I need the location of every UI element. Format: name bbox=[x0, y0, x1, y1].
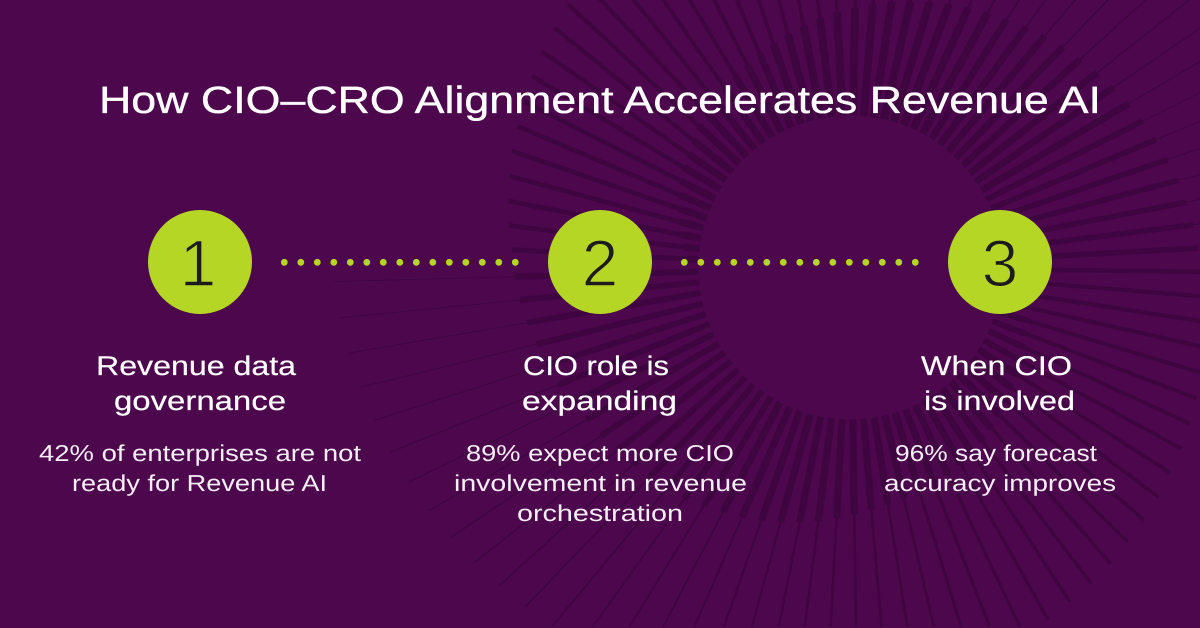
heading: CIO role is expanding bbox=[522, 351, 677, 416]
text: 42% stat bbox=[39, 440, 362, 496]
dotted connector: step 2 to step 3 bbox=[684, 259, 916, 266]
text: 89% stat: 89% expect more CIO bbox=[466, 440, 734, 466]
heading: CIO role is expanding: CIO role is bbox=[523, 351, 669, 381]
text: 89% stat: orchestration bbox=[517, 500, 683, 526]
heading: when CIO is involved: When CIO bbox=[921, 351, 1072, 381]
heading: revenue data governance: governance bbox=[114, 386, 286, 416]
number badge 3: 3 bbox=[982, 226, 1018, 300]
number badge 3 bbox=[948, 210, 1052, 314]
text: 96% stat: 96% say forecast bbox=[895, 440, 1098, 466]
text: 89% stat bbox=[454, 440, 747, 526]
text: 42% stat: ready for Revenue AI bbox=[72, 470, 327, 496]
panel: step 1 bbox=[39, 210, 362, 496]
dotted connector: step 1 to step 2 bbox=[284, 259, 516, 266]
number badge 2: 2 bbox=[582, 226, 618, 300]
heading: when CIO is involved: is involved bbox=[924, 386, 1075, 416]
panel: step 2 bbox=[454, 210, 747, 526]
text: 42% stat: 42% of enterprises are not bbox=[39, 440, 362, 466]
heading: revenue data governance bbox=[96, 351, 297, 416]
heading: revenue data governance: Revenue data bbox=[96, 351, 297, 381]
heading: when CIO is involved bbox=[921, 351, 1075, 416]
title: How CIO–CRO Alignment Accelerates Revenue AI bbox=[99, 80, 1101, 122]
number badge 2 bbox=[548, 210, 652, 314]
text: 96% stat: accuracy improves bbox=[884, 470, 1116, 496]
sunburst background rays bbox=[334, 0, 1200, 628]
text: 96% stat bbox=[884, 440, 1116, 496]
text: 89% stat: involvement in revenue bbox=[454, 470, 747, 496]
heading: CIO role is expanding: expanding bbox=[522, 386, 677, 416]
number badge 1: 1 bbox=[180, 226, 216, 300]
number badge 1 bbox=[148, 210, 252, 314]
panel: step 3 bbox=[884, 210, 1116, 496]
